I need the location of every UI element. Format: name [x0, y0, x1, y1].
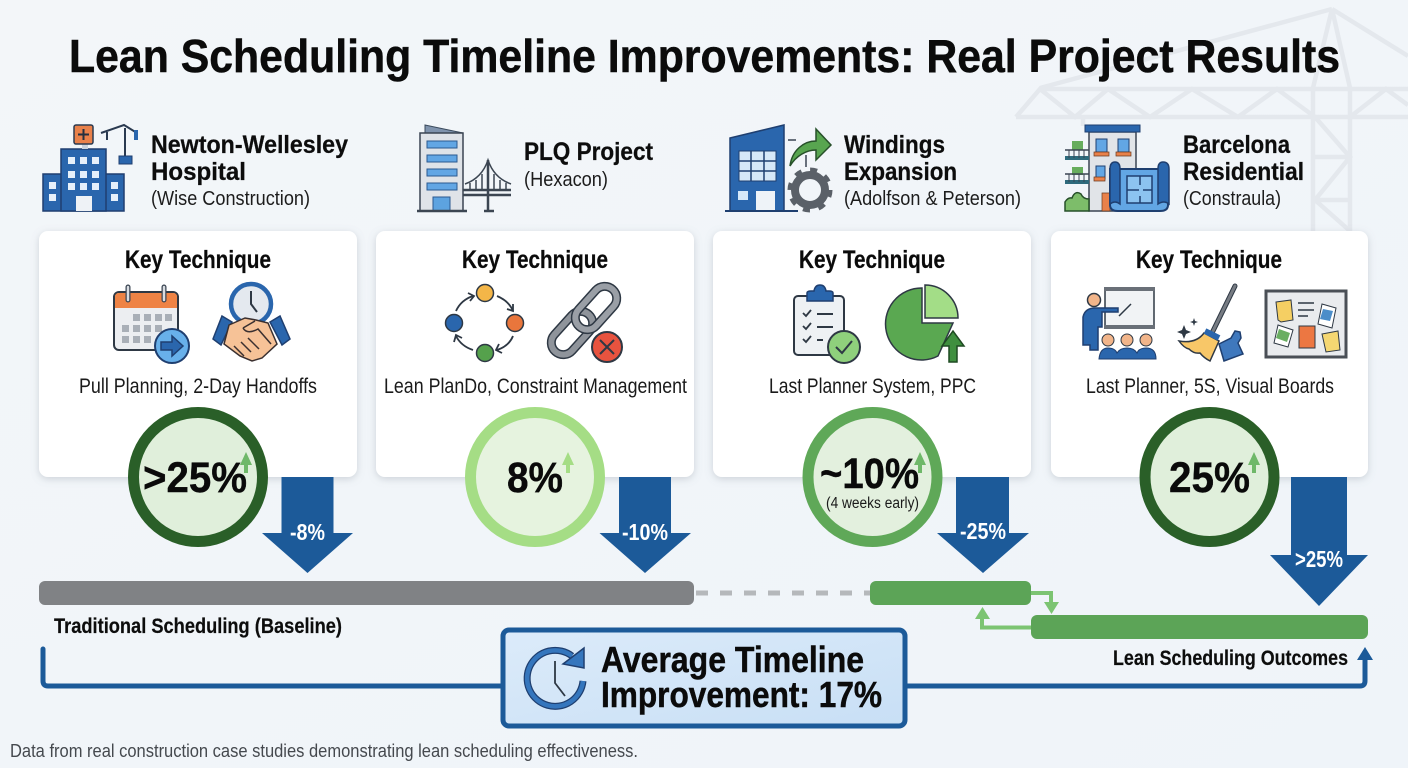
timeline: lean bar 1 — [870, 581, 1031, 605]
icon: teacher at whiteboard with audience — [1083, 287, 1156, 359]
down arrow: >25%: >25% — [1295, 546, 1343, 572]
card background — [376, 231, 694, 477]
down arrow: >25% — [1270, 477, 1368, 606]
technique label: Pull Planning, 2-Day Handoffs — [79, 374, 317, 398]
result badge: >25% — [134, 412, 262, 542]
icon: visual board with notes — [1266, 291, 1346, 357]
technique label: Lean PlanDo, Constraint Management — [384, 374, 687, 398]
bracket line left — [43, 649, 502, 686]
icon: clock and handshake — [213, 284, 290, 361]
icon: interlocked chain links — [546, 281, 622, 362]
panel: Barcelona Residential header — [1065, 125, 1304, 211]
title: Lean Scheduling Timeline Improvements: Real Project Results — [69, 30, 1340, 82]
down arrow: -8%: -8% — [290, 519, 325, 545]
timeline: traditional baseline bar — [39, 581, 694, 605]
footer note: Data from real construction case studies demonstrating lean scheduling effectiveness. — [10, 740, 638, 761]
icon: broom and dustpan — [1177, 286, 1243, 361]
card heading: Key Technique — [462, 246, 608, 274]
callout text line 2: Improvement: 17% — [601, 674, 882, 715]
panel: technique card 3 — [713, 231, 1031, 477]
icon: clipboard checklist — [794, 285, 860, 363]
callout: average timeline improvement — [503, 630, 905, 726]
heading: PLQ Project — [524, 138, 654, 166]
contractor: (Constraula) — [1183, 187, 1281, 210]
heading line 2: Hospital — [151, 158, 246, 186]
card heading: Key Technique — [1136, 246, 1282, 274]
icon: apartment with blueprint — [1065, 125, 1169, 211]
label: traditional scheduling: Traditional Scheduling (Baseline) — [54, 615, 342, 638]
card heading: Key Technique — [799, 246, 945, 274]
card background — [39, 231, 357, 477]
result badge: ~10% — [808, 412, 937, 542]
result badge: >25%: >25% — [143, 454, 247, 502]
timeline: lean bar 2 — [1031, 615, 1368, 639]
contractor: (Hexacon) — [524, 168, 608, 191]
result badge: 25% — [1145, 412, 1274, 542]
timeline: dashed projection — [696, 590, 870, 596]
panel: technique card 1 — [39, 231, 357, 477]
connector arrow back — [975, 607, 1031, 628]
heading: Barcelona — [1183, 131, 1291, 159]
technique label: Last Planner, 5S, Visual Boards — [1086, 374, 1334, 398]
result badge: 8%: 8% — [507, 454, 563, 502]
card background — [713, 231, 1031, 477]
technique label: Last Planner System, PPC — [769, 374, 976, 398]
icon: pie chart with up arrow — [886, 285, 964, 362]
icon: building, arrow and gear — [725, 125, 831, 211]
heading: Newton-Wellesley — [151, 131, 348, 159]
icon: calendar — [114, 287, 189, 363]
contractor: (Wise Construction) — [151, 187, 310, 210]
down arrow: -8% — [262, 477, 353, 573]
icon: cycle of four dots — [446, 284, 524, 362]
result badge: 25%: 25% — [1169, 454, 1250, 502]
panel: Windings Expansion header — [725, 125, 1021, 211]
result badge: ~10%: ~10% — [820, 450, 919, 498]
panel: PLQ project header — [417, 125, 654, 211]
result badge: 8% — [470, 412, 600, 542]
card heading: Key Technique — [125, 246, 271, 274]
label: lean scheduling outcomes: Lean Scheduling Outcomes — [1113, 647, 1348, 670]
panel: Newton-Wellesley project header — [43, 125, 348, 211]
down arrow: -25%: -25% — [960, 518, 1006, 544]
heading line 2: Residential — [1183, 158, 1304, 186]
contractor: (Adolfson & Peterson) — [844, 187, 1021, 210]
down arrow: -10% — [600, 477, 691, 573]
heading: Windings — [844, 131, 945, 159]
background crane watermark — [1016, 9, 1408, 231]
callout text line 1: Average Timeline — [601, 639, 864, 680]
panel: technique card 2 — [376, 231, 694, 477]
icon: clock with circular arrow — [527, 648, 584, 706]
panel: technique card 4 — [1051, 231, 1368, 477]
heading line 2: Expansion — [844, 158, 957, 186]
card background — [1051, 231, 1368, 477]
down arrow: -25% — [937, 477, 1029, 573]
connector arrow forward — [1031, 593, 1059, 614]
icon: hospital with crane — [43, 125, 138, 211]
icon: tower and bridge — [417, 125, 511, 211]
down arrow: -10%: -10% — [622, 519, 668, 545]
result badge: ~10%: (4 weeks early) — [826, 495, 919, 512]
bracket arrow right — [906, 647, 1373, 686]
